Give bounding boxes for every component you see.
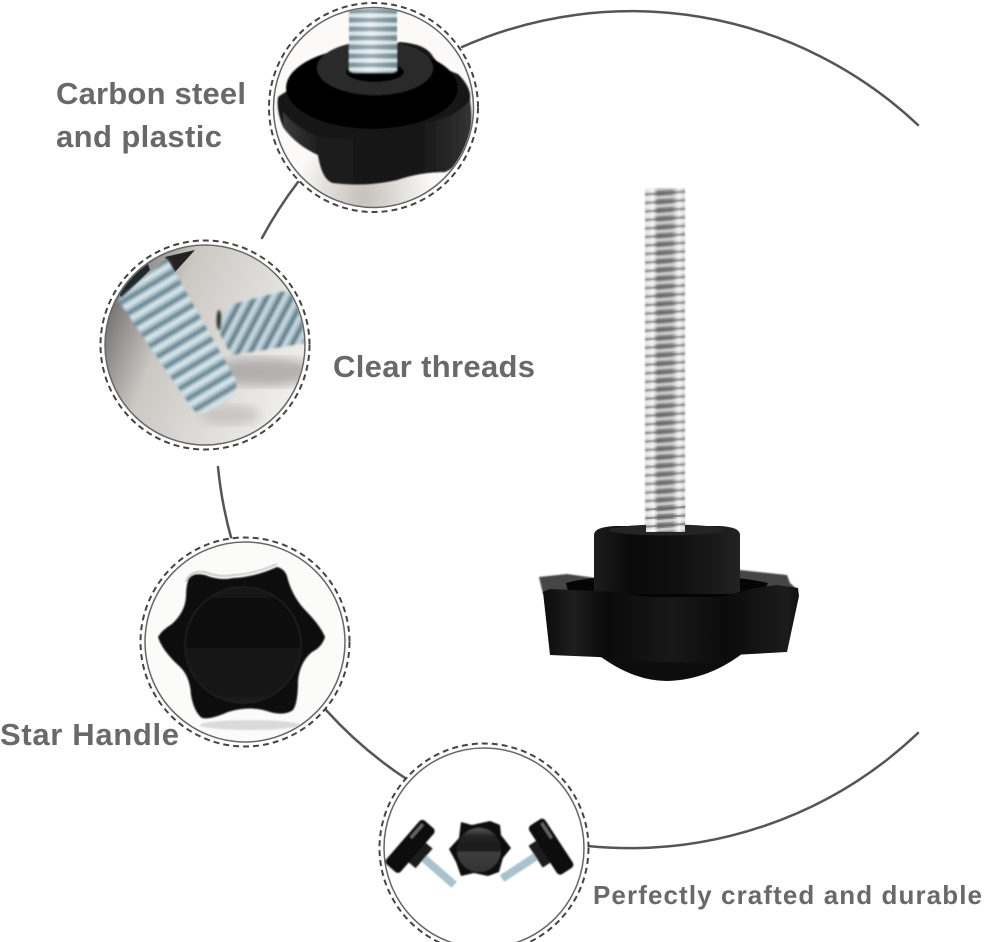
close-up bolts bbox=[117, 250, 304, 427]
threaded shaft bbox=[645, 188, 685, 533]
label: star handle: Star Handle bbox=[0, 717, 179, 752]
main product: star knob bolt bbox=[539, 188, 799, 681]
connecting ring arcs bbox=[218, 11, 918, 848]
star base front face bbox=[543, 585, 799, 663]
callout circle: perfectly crafted and durable bbox=[380, 744, 588, 942]
knob back rim bbox=[539, 570, 798, 594]
close-up knob from above bbox=[278, 3, 471, 184]
label: carbon steel and plastic: Carbon steel bbox=[56, 76, 246, 111]
centre knob dome bbox=[457, 828, 501, 872]
knob shadow bbox=[200, 720, 300, 730]
right knob bbox=[486, 817, 575, 903]
collar top ring bbox=[609, 524, 725, 536]
callout circle: star handle bbox=[140, 538, 350, 746]
label: clear threads: Clear threads bbox=[333, 349, 535, 384]
six-lobed knob bbox=[158, 564, 325, 718]
left knob bbox=[384, 818, 473, 907]
callout circle: clear threads bbox=[96, 240, 320, 450]
callout circle: carbon steel and plastic bbox=[269, 3, 478, 212]
knob collar bbox=[594, 526, 740, 594]
lower dome bbox=[592, 650, 747, 681]
centre knob bbox=[449, 821, 511, 876]
knob recess bbox=[566, 576, 768, 600]
label: perfectly crafted and durable: Perfectly crafted and durable bbox=[593, 880, 982, 910]
label: carbon steel and plastic: and plastic bbox=[56, 119, 222, 154]
trio of knobs bbox=[384, 817, 575, 907]
label: carbon steel and plastic bbox=[56, 76, 246, 154]
shaft base bbox=[646, 505, 685, 532]
